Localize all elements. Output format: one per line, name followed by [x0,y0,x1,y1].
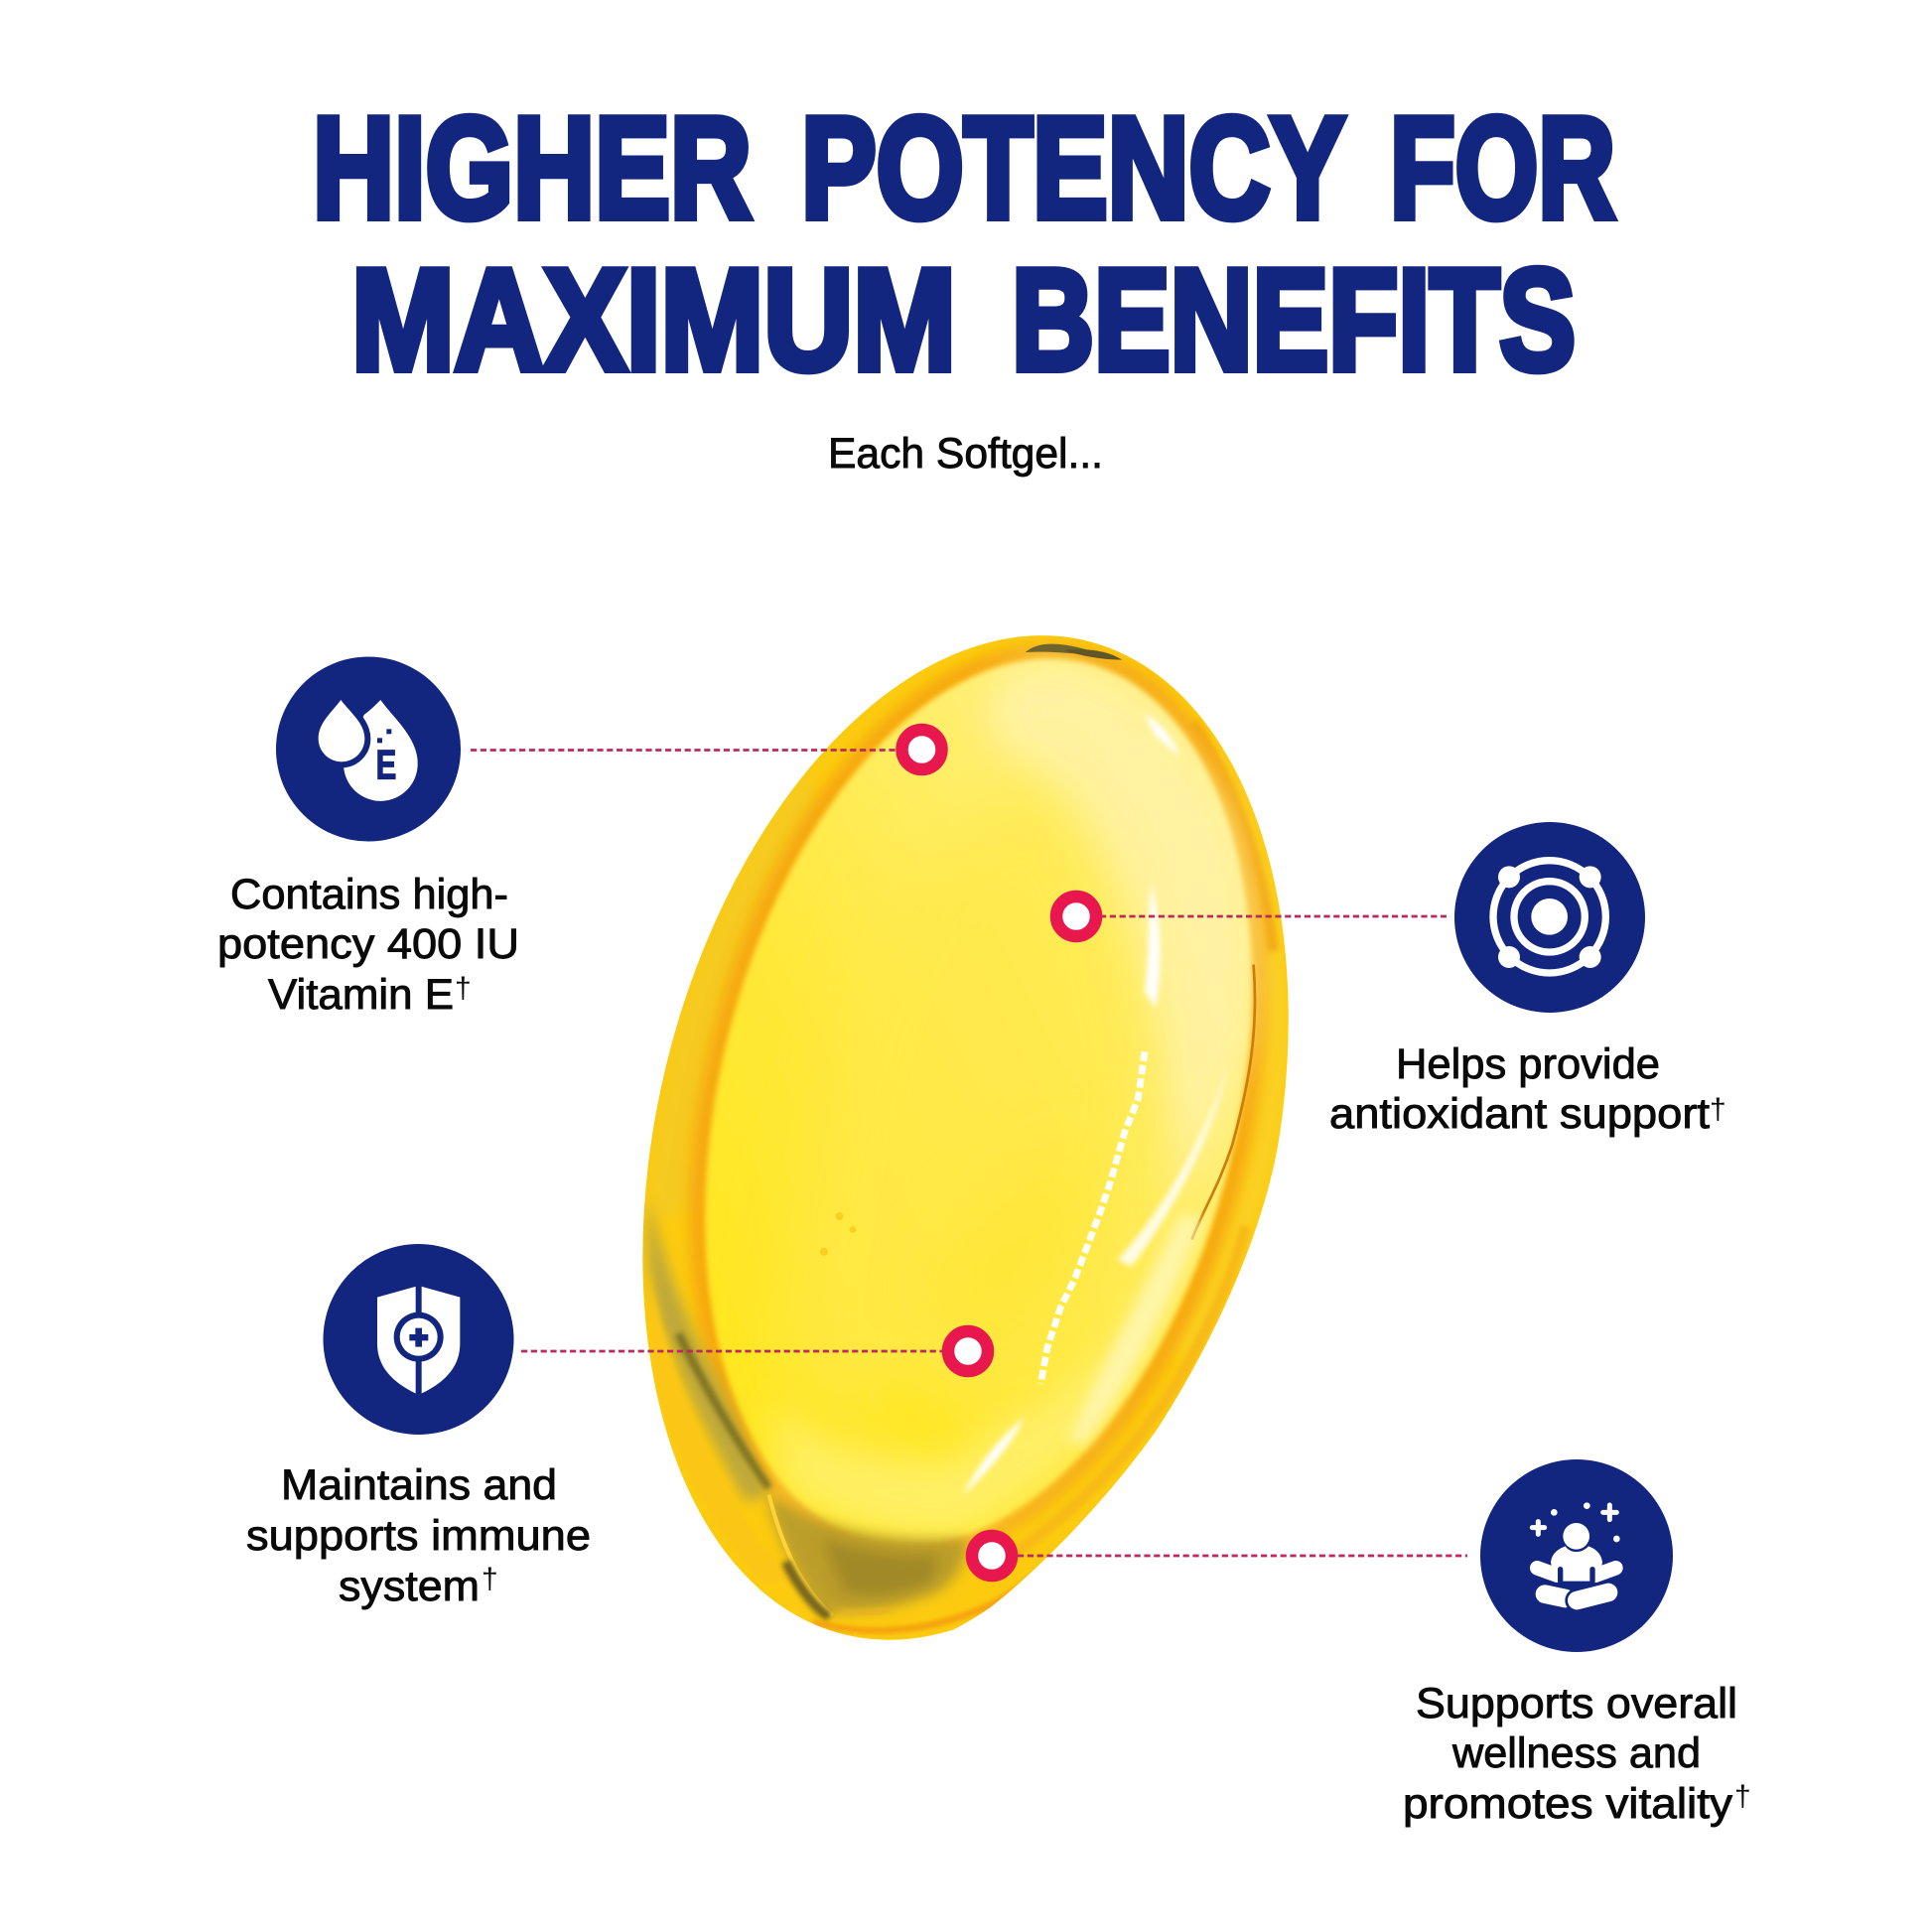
callout: antioxidant [1056,822,1726,1138]
marker [1056,897,1096,936]
connector line [1018,1555,1467,1557]
label: † [1710,1093,1726,1126]
label [1329,1040,1726,1138]
label: Maintains and [281,1461,557,1509]
label: promotes vitality [1403,1780,1733,1828]
label: antioxidant support [1329,1090,1710,1138]
label [1403,1680,1751,1828]
title line 1 [313,87,1615,248]
marker [948,1331,988,1371]
label: † [455,972,472,1005]
label: potency 400 IU [217,920,519,968]
connector line [521,1350,945,1352]
title line 2: MAXIMUM [351,239,956,400]
label: Contains high- [230,871,508,918]
label: supports immune [246,1512,591,1560]
connector line [471,749,898,752]
icon: meditating person [1480,1459,1673,1652]
title line 1: HIGHER [313,87,752,248]
icon: shield with cross [324,1244,514,1435]
title [313,87,1615,400]
label [217,871,519,1019]
label: Supports overall [1416,1680,1737,1727]
title line 2: BENEFITS [1012,239,1576,400]
callout: wellness [972,1459,1751,1828]
icon: oil drops with letter E: E [376,741,396,787]
marker [972,1536,1012,1576]
callout: immune system [246,1244,988,1610]
title line 1: POTENCY [801,87,1345,248]
title line 1: FOR [1390,87,1615,248]
callout: vitamin E [217,657,941,1019]
label: † [482,1563,498,1595]
label: † [1734,1780,1751,1813]
label: Helps provide [1396,1040,1660,1088]
subtitle: Each Softgel... [828,430,1103,478]
icon: atom rings [1454,822,1645,1013]
label [246,1461,591,1610]
icon: oil drops with letter E [276,657,461,842]
label: Vitamin E [268,971,454,1019]
label: system [339,1563,480,1610]
title line 2 [351,239,1576,400]
label: wellness and [1451,1729,1701,1777]
marker [901,730,941,769]
connector line [1100,915,1447,917]
softgel capsule [642,635,1289,1640]
